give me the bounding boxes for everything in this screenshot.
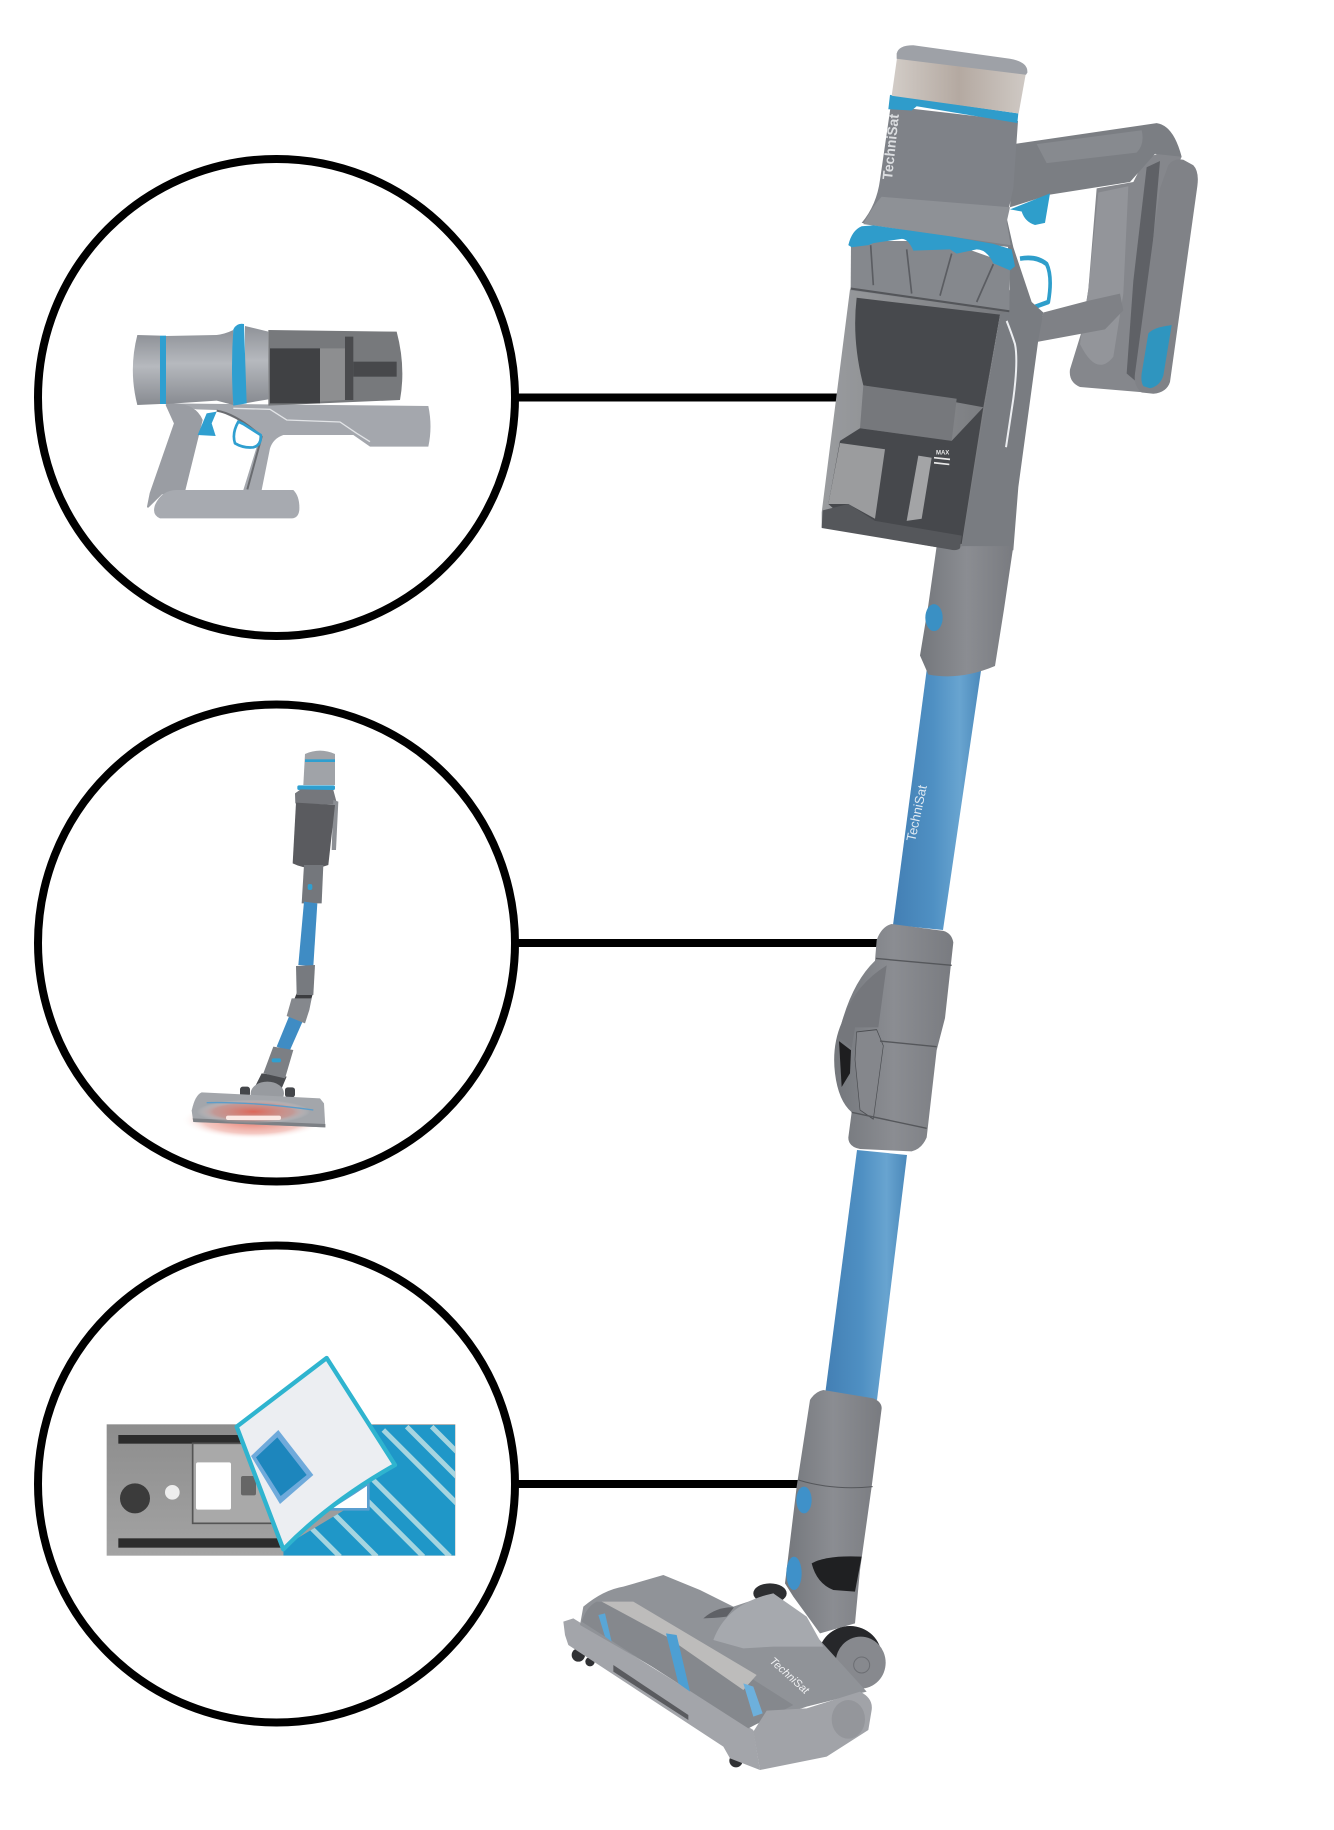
- white accent line: [1006, 321, 1016, 447]
- filter end: [133, 335, 160, 405]
- arch seam: [217, 411, 262, 489]
- main stem: [960, 218, 1043, 552]
- joint latch: [838, 965, 887, 1048]
- cone seams: [871, 245, 993, 302]
- rear wheel small: [753, 1583, 787, 1603]
- side handle: [332, 800, 338, 850]
- wand joint: [834, 924, 953, 1151]
- lower joint: [287, 998, 312, 1023]
- motor blue band: [305, 759, 335, 762]
- trigger: [1010, 193, 1050, 225]
- speaker grille: [832, 1700, 865, 1739]
- plate window: [196, 1462, 231, 1510]
- hinge: [293, 992, 313, 1002]
- icon: handheld vacuum: [133, 324, 430, 518]
- lower joint and floor head: [563, 1390, 886, 1770]
- upper joint: [296, 965, 315, 995]
- brush window: [582, 1602, 793, 1728]
- upper wand tube: [893, 660, 982, 930]
- button: [272, 1058, 281, 1062]
- rear vent: [703, 1607, 734, 1618]
- head brand text: TechniSat: [879, 113, 902, 180]
- upper tube: [298, 902, 317, 966]
- brush stripe 1: [598, 1613, 612, 1642]
- blue stripes on head: [207, 1103, 313, 1110]
- wand brand text: TechniSat: [903, 783, 930, 843]
- fork: [255, 1073, 287, 1088]
- blue button: [796, 1487, 812, 1513]
- light glow: [182, 1101, 325, 1139]
- icon: vacuum with bent wand: [182, 751, 338, 1139]
- battery badge: [1141, 325, 1172, 388]
- handle and nozzle: [163, 403, 430, 490]
- bin interior dark: [270, 348, 320, 403]
- lower stem: [920, 546, 1013, 676]
- head dark edge: [193, 1118, 325, 1127]
- head top body: [580, 1575, 867, 1725]
- wheel: [818, 1626, 882, 1687]
- flexible hose: [812, 1556, 862, 1592]
- bin: [293, 803, 335, 868]
- base plate: [563, 1618, 760, 1770]
- leader line 3: [516, 1480, 798, 1488]
- clip: [241, 1476, 256, 1495]
- floor head: [192, 1092, 325, 1127]
- icon: mop plate and cloth: [107, 1358, 493, 1557]
- glow on head: [197, 1100, 310, 1124]
- motor collar highlight: [863, 197, 1011, 245]
- ring: [297, 785, 335, 790]
- button: [308, 884, 312, 890]
- stem button: [925, 604, 943, 631]
- filter mesh: [892, 56, 1026, 113]
- leader line 2: [516, 939, 878, 947]
- grip: [148, 404, 202, 507]
- inner recess: [193, 1443, 276, 1523]
- battery: [154, 490, 299, 518]
- striped mop pad: [283, 1425, 455, 1556]
- top cap: [897, 45, 1027, 75]
- cone section: [851, 241, 1010, 311]
- cone: [295, 789, 337, 805]
- bin upper dark: [855, 298, 1000, 407]
- dust bin: [268, 330, 402, 406]
- bin interior mid: [345, 337, 353, 400]
- bin left light box: [828, 443, 885, 519]
- callout 2: circle with flexible wand: [38, 704, 878, 1182]
- joint housing: [834, 924, 953, 1151]
- foot joint: [263, 1047, 293, 1078]
- battery: [1135, 159, 1198, 394]
- bin capacity text: MAX: [936, 450, 949, 456]
- bottom slot: [118, 1538, 285, 1548]
- neck dome: [713, 1593, 823, 1648]
- bin small light box: [907, 456, 932, 521]
- round hole: [120, 1483, 150, 1513]
- side wheels: [240, 1087, 250, 1097]
- blue band: [160, 336, 166, 404]
- release loop: [1020, 258, 1050, 307]
- joint seam: [798, 1480, 873, 1488]
- callout 1: circle with handheld unit: [38, 159, 837, 636]
- bin base: [822, 504, 962, 550]
- small wheels: [572, 1648, 585, 1662]
- wheel hub ring: [854, 1657, 870, 1673]
- motor cylinder: [303, 751, 335, 785]
- lower tube: [277, 1010, 304, 1052]
- nozzle seam: [233, 408, 370, 442]
- bin seam: [851, 289, 1009, 311]
- blue button 2: [786, 1557, 802, 1590]
- brush stripe 3: [743, 1683, 763, 1717]
- wheel cap: [836, 1637, 886, 1689]
- floor head brand text: TechniSat: [767, 1655, 812, 1697]
- motor body: [166, 330, 233, 405]
- circle outline 1: [38, 159, 515, 636]
- blue collar band: [888, 95, 1018, 123]
- joint seams: [852, 958, 952, 1128]
- main vacuum cleaner: [563, 45, 1198, 1770]
- blue ring: [232, 324, 247, 406]
- dust bin: [822, 289, 1009, 550]
- bin core: [353, 362, 397, 377]
- base slot: [613, 1665, 688, 1720]
- mount recess: [1080, 186, 1128, 365]
- trigger: [198, 412, 217, 436]
- lower wand tube: [825, 1150, 907, 1400]
- bin capacity lines: [934, 458, 950, 464]
- joint pivot: [855, 1030, 883, 1119]
- bin interior pale: [320, 348, 345, 402]
- brush stripe 2: [666, 1633, 690, 1692]
- bin lower dark: [828, 407, 983, 544]
- window pale highlight: [602, 1602, 757, 1690]
- cone: [245, 326, 268, 403]
- head assembly: [822, 45, 1198, 676]
- handle top panel: [1037, 130, 1143, 163]
- LED lights: [226, 1116, 281, 1120]
- lower arm: [1037, 294, 1123, 342]
- plate: [107, 1424, 455, 1556]
- lower joint housing: [785, 1390, 882, 1633]
- top slot: [118, 1435, 240, 1444]
- cloth window frame: [251, 1430, 313, 1504]
- upper handle arm: [1010, 123, 1182, 207]
- blue scalloped ring: [848, 225, 1015, 270]
- joint opening: [839, 1041, 851, 1087]
- callout 3: circle with mop plate: [38, 1246, 798, 1722]
- release loop: [234, 422, 261, 447]
- floor head dome: [251, 1082, 284, 1105]
- cloth: [237, 1358, 395, 1549]
- mount dark strip: [1127, 161, 1160, 382]
- bin middle band: [860, 385, 957, 441]
- circle outline 2: [38, 704, 515, 1182]
- second window: [328, 1483, 368, 1509]
- leader line 1: [516, 394, 837, 402]
- battery mount: [1070, 151, 1182, 392]
- dial: [165, 1485, 180, 1500]
- end cap: [753, 1692, 872, 1770]
- neck: [302, 865, 323, 903]
- cloth window inner: [256, 1437, 307, 1496]
- motor body: [862, 106, 1018, 247]
- circle outline 3: [38, 1246, 515, 1722]
